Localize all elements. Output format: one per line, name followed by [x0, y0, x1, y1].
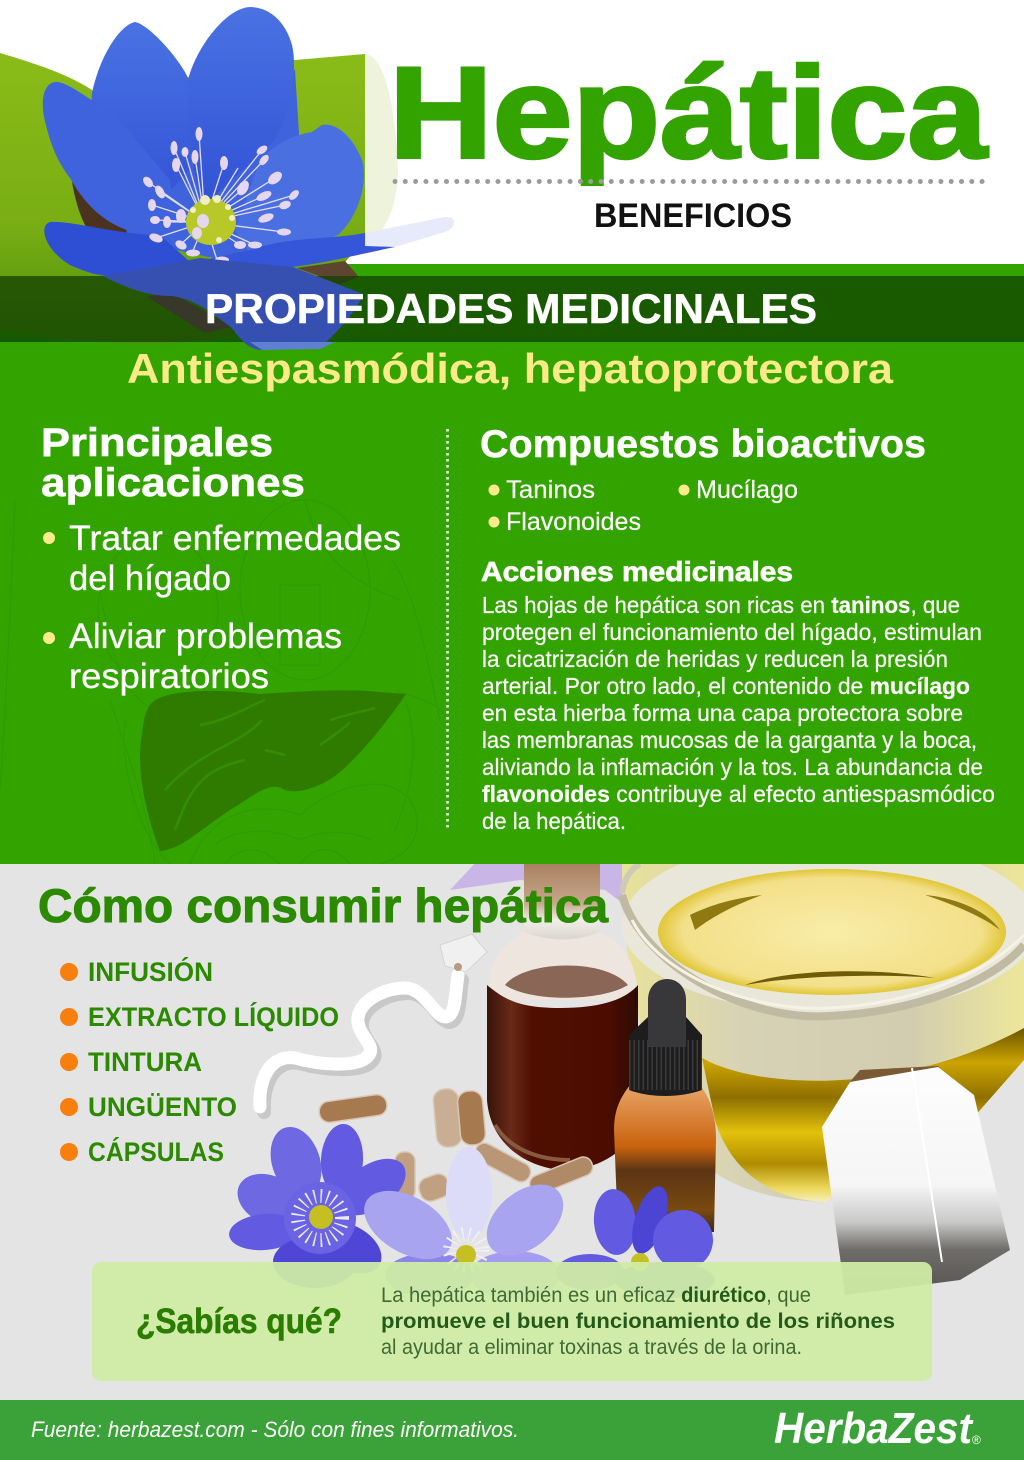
flower parts over the strip [103, 258, 363, 350]
banner: dark strip [0, 276, 1024, 342]
item: tintura: TINTURA [88, 1047, 202, 1077]
logo: HerbaZest: HerbaZest [774, 1404, 974, 1453]
compound list: Taninos [506, 476, 595, 504]
petal: bottom right [195, 233, 395, 268]
lower petal tip below strip [250, 342, 335, 350]
paragraph: Las hojas de hepática son ricas en taninos, que [482, 592, 962, 618]
flower right [556, 1182, 724, 1298]
petal: right [235, 125, 364, 268]
petal: left [43, 82, 178, 240]
petals [92, 70, 300, 268]
tea bag [822, 1066, 1010, 1295]
stamens [450, 1234, 482, 1266]
heading: Compuestos bioactivos [480, 423, 926, 466]
paragraph: las membranas mucosas de la garganta y la boca, [482, 727, 977, 753]
tube cap [440, 934, 487, 972]
dark underside of petals [72, 182, 135, 234]
dark sepal [147, 292, 232, 333]
lower petal [103, 258, 363, 350]
pale fade over leaf [365, 54, 398, 246]
subtitle: beneficios: BENEFICIOS [594, 197, 792, 235]
compound list: Mucílago [696, 476, 798, 504]
callout text: al ayudar a eliminar toxinas a través de la orina. [381, 1336, 802, 1359]
rubber bulb [648, 979, 686, 1047]
petal: bottom left [44, 222, 190, 276]
ointment tube and cream [260, 934, 487, 1112]
item: infusión: INFUSIÓN [88, 956, 213, 987]
leaf [0, 53, 365, 343]
string [912, 1068, 942, 1262]
jar body [622, 864, 1024, 1202]
panel: how to consume background [0, 864, 1024, 1400]
callout heading: ¿Sabías qué? [136, 1302, 342, 1341]
compound list: Flavonoides [506, 508, 641, 536]
heading: aplicaciones [41, 461, 305, 505]
glass body [487, 985, 638, 1170]
stamen anthers [141, 127, 301, 264]
cream [260, 975, 458, 1107]
stamen filaments [148, 134, 294, 260]
callout: sabías qué [92, 1262, 932, 1381]
jar inside [622, 864, 1024, 1012]
upper liquid highlight [505, 965, 628, 998]
amber body [614, 1085, 716, 1232]
violet flowers [228, 1120, 724, 1299]
oil lower band [702, 1028, 1024, 1202]
list: consumption forms [60, 956, 339, 1167]
oil dark glints [690, 895, 1000, 930]
glass rim [622, 895, 1024, 1016]
paragraph: la cicatrización de heridas y reducen la presión [482, 646, 948, 672]
glass jar with oil [622, 837, 1024, 1202]
paragraph: arterial. Por otro lado, el contenido de mucílago [482, 673, 971, 699]
petal: top left [92, 22, 190, 212]
black cap [629, 1017, 702, 1096]
heading: Principales [41, 421, 273, 465]
capsules [318, 1088, 595, 1204]
flower left [228, 1120, 416, 1288]
icon: liver silhouette [140, 690, 406, 851]
paragraph: aliviando la inflamación y la tos. La abundancia de [482, 754, 983, 780]
text block: compuestos bioactivos [480, 423, 926, 536]
callout text: promueve el buen funcionamiento de los riñones [381, 1310, 895, 1333]
item: cápsulas: CÁPSULAS [88, 1136, 224, 1167]
dropper bottle [614, 979, 716, 1232]
bullet text: respiratorios: Aliviar problemas [69, 617, 342, 656]
bullet marker [43, 632, 55, 644]
registered mark: ® [972, 1433, 981, 1447]
compound list [488, 476, 798, 536]
title: Hepática: Hepática [389, 40, 989, 186]
paragraph: de la hepática. [482, 808, 626, 834]
tab [848, 1066, 940, 1085]
pale flower behind bottle [450, 864, 622, 901]
cork [524, 864, 600, 942]
bullet text: respiratorios: respiratorios [69, 657, 269, 696]
cream shadow [264, 980, 462, 1112]
illustration: leaf and flower [0, 7, 454, 343]
petal translucent tip [365, 217, 454, 247]
callout text: La hepática también es un eficaz diurético, que [381, 1284, 813, 1307]
pollen on centre [190, 195, 235, 243]
heading: antiespasmódica, hepatoprotectora: Antiespasmódica, hepatoprotectora [127, 345, 894, 392]
brown leaf fragment [297, 261, 359, 284]
bottom highlight [495, 1125, 570, 1160]
cap ribs [629, 1040, 702, 1090]
heading: cómo consumir hepática: Cómo consumir hepática [38, 879, 609, 932]
oil surface [658, 869, 1006, 995]
stamens [298, 1196, 342, 1240]
item: ungüento: UNGÜENTO [88, 1092, 237, 1122]
bullet text: hígado: del hígado [69, 559, 231, 598]
illustration: faint body anatomy and liver [0, 500, 447, 864]
callout box [92, 1262, 932, 1381]
banner text: propiedades medicinales: PROPIEDADES MEDICINALES [205, 285, 817, 332]
illustration: products [228, 837, 1024, 1299]
glass shoulder [487, 932, 638, 1000]
bullet text: hígado: Tratar enfermedades [69, 519, 401, 558]
dotted divider under title [395, 179, 988, 184]
item: extracto líquido: EXTRACTO LÍQUIDO [88, 1001, 339, 1032]
bag [822, 1067, 1010, 1295]
text block: acciones medicinales [481, 556, 1001, 834]
flower centre [186, 199, 236, 245]
paragraph: protegen el funcionamiento del hígado, estimulan [482, 619, 982, 645]
flower centre [364, 1147, 564, 1265]
paragraph: en esta hierba forma una capa protectora sobre [482, 700, 963, 726]
source text: Fuente: herbazest.com - Sólo con fines informativos. [31, 1417, 519, 1442]
text block: principales aplicaciones [41, 421, 401, 696]
footer [0, 1400, 1024, 1460]
dark bottle [487, 864, 638, 1170]
paragraph: flavonoides contribuye al efecto antiespasmódico [482, 781, 995, 807]
panel: green properties section background [0, 264, 1024, 864]
petal: top right [187, 7, 294, 205]
heading: Acciones medicinales [481, 556, 793, 587]
bullet marker [43, 532, 55, 544]
